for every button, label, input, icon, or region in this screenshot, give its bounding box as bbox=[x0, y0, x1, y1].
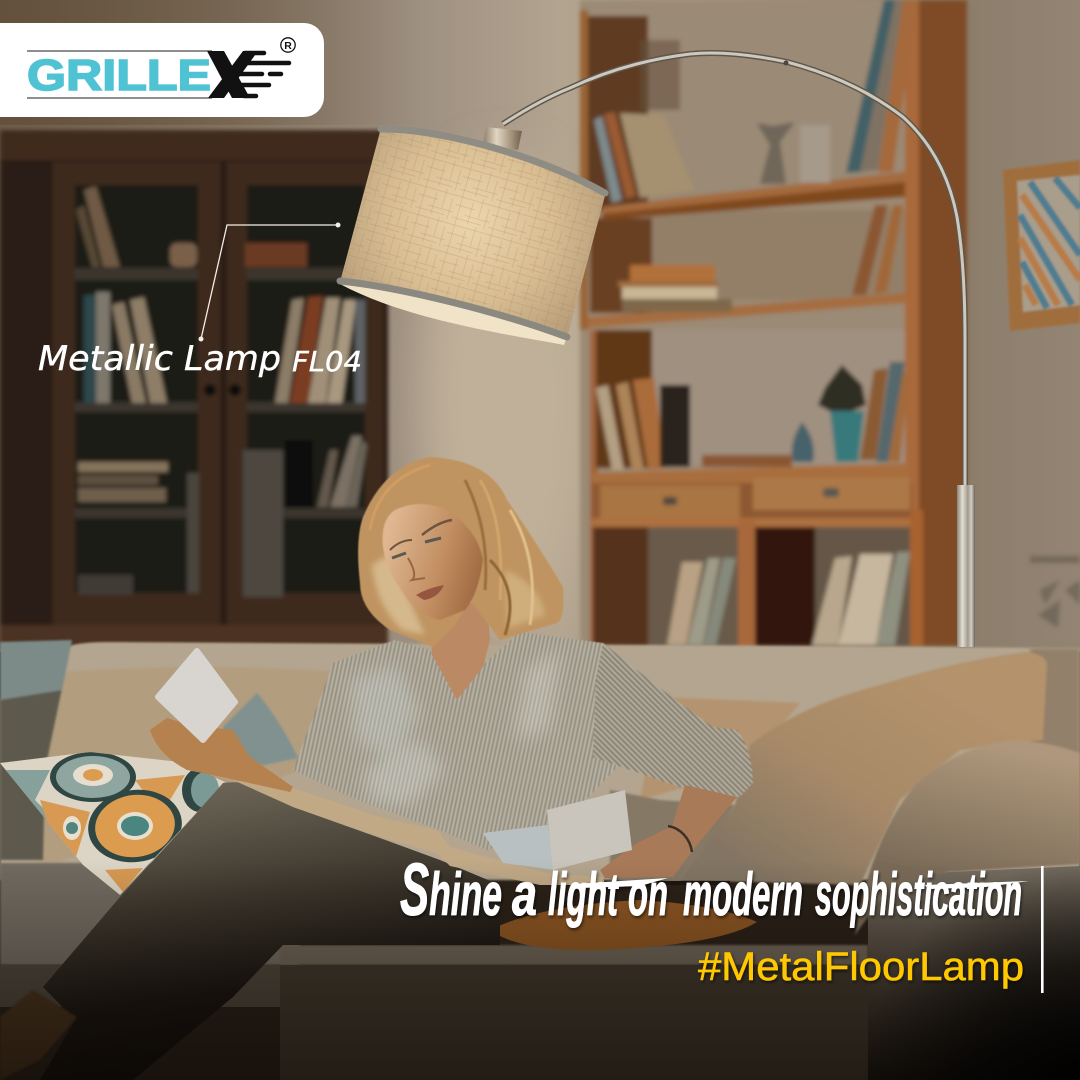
logo X mark bbox=[207, 51, 289, 98]
tan cushion behind arm bbox=[640, 697, 800, 800]
right forearm and hand bbox=[600, 785, 737, 878]
lamp base tube bbox=[957, 485, 975, 647]
trousers bbox=[40, 782, 500, 1080]
lamp arm bbox=[503, 53, 965, 485]
logo panel bbox=[0, 23, 324, 117]
dark throw pillow bbox=[0, 640, 72, 860]
sofa cushions bbox=[490, 652, 1080, 950]
logo wordmark: GRILLE bbox=[27, 51, 211, 100]
left back cushion bbox=[38, 667, 345, 862]
headline tagline: a bbox=[512, 861, 537, 928]
floor lamp bbox=[340, 53, 975, 647]
centre seat front bbox=[280, 965, 868, 1080]
headline tagline: light bbox=[548, 861, 620, 928]
callout leader line bbox=[198, 222, 340, 342]
foot bbox=[0, 990, 77, 1080]
headline tagline bbox=[400, 848, 1029, 931]
hashtag: #MetalFloorLamp bbox=[698, 945, 1024, 989]
open book and papers bbox=[233, 780, 730, 885]
right shirt sleeve bbox=[593, 643, 753, 797]
right wooden bookcase bbox=[580, 0, 967, 646]
lower cushion body bbox=[610, 790, 735, 882]
lamp shade bbox=[340, 128, 606, 345]
centre seat bbox=[280, 945, 868, 965]
right round cushion bbox=[855, 740, 1080, 935]
patterned pillow bbox=[0, 750, 230, 900]
callout label: FL04 bbox=[292, 345, 362, 378]
left glass cabinet bbox=[0, 130, 388, 647]
bottom shading bbox=[0, 860, 1080, 1080]
face bbox=[382, 504, 483, 620]
wall plant bbox=[1030, 556, 1080, 628]
vertical accent rule bbox=[1041, 866, 1044, 993]
raised hand bbox=[150, 718, 293, 792]
neck bbox=[430, 600, 490, 700]
left seat cushion bbox=[0, 863, 300, 965]
bracelet bbox=[668, 826, 692, 852]
lamp socket bbox=[483, 127, 522, 150]
headline tagline: on bbox=[628, 861, 668, 928]
right sofa arm bbox=[868, 866, 1080, 1080]
bookcase books and ornaments bbox=[594, 0, 910, 645]
blue striped pillow bbox=[223, 693, 298, 770]
arm joint bbox=[784, 60, 788, 66]
sofa bbox=[0, 640, 1080, 1080]
large tan cushion bbox=[680, 652, 1047, 885]
sofa back right shaded bbox=[1030, 648, 1080, 760]
logo rules bbox=[27, 51, 212, 98]
sofa back rest bbox=[0, 642, 1080, 880]
hair bbox=[358, 457, 563, 647]
headline tagline: modern bbox=[683, 861, 803, 928]
shirt body bbox=[293, 632, 620, 850]
woman reading on sofa bbox=[0, 457, 753, 1080]
registered mark bbox=[281, 38, 295, 52]
bookcase right upright bbox=[905, 0, 919, 646]
callout label: Metallic Lamp bbox=[38, 339, 281, 379]
left seat front bbox=[0, 965, 300, 1007]
white cup bbox=[158, 651, 235, 740]
registered mark: R bbox=[284, 40, 292, 52]
framed wall art bbox=[1003, 160, 1080, 331]
leather cushion bbox=[490, 900, 757, 950]
dark book spine bbox=[610, 881, 730, 885]
shirt highlights bbox=[350, 650, 560, 805]
headline tagline: Shine bbox=[400, 848, 502, 931]
